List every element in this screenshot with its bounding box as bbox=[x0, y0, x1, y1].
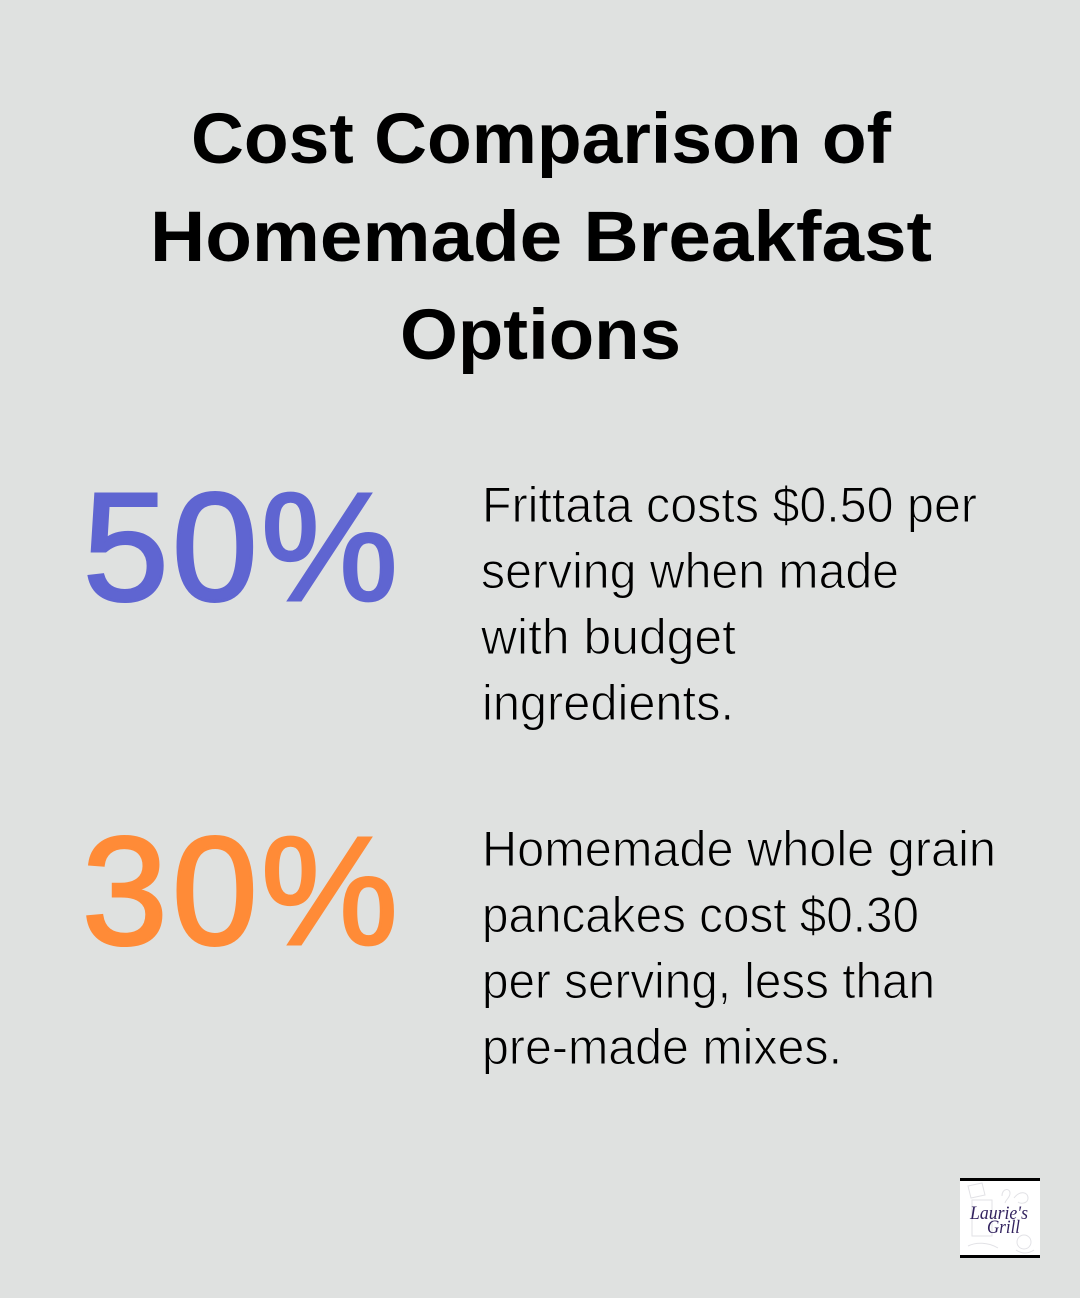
description: pancake cost: per serving, less than bbox=[482, 953, 935, 1009]
title bbox=[150, 100, 932, 375]
description: pancake cost: Homemade whole grain bbox=[482, 821, 996, 877]
description: pancake cost bbox=[482, 821, 996, 1075]
description: frittata cost: serving when made bbox=[481, 543, 899, 599]
logo: Laurie's Grill: Grill bbox=[987, 1217, 1020, 1238]
title: Homemade Breakfast bbox=[150, 198, 932, 277]
description: frittata cost: ingredients. bbox=[482, 675, 734, 731]
title: Cost Comparison of bbox=[191, 100, 891, 179]
description: frittata cost bbox=[480, 477, 977, 731]
description: pancake cost: pre-made mixes. bbox=[482, 1019, 842, 1075]
title: Options bbox=[400, 296, 681, 375]
stat: 30%: 30% bbox=[82, 805, 398, 977]
stat: 50%: 50% bbox=[83, 461, 398, 633]
description: frittata cost: with budget bbox=[480, 609, 736, 665]
description: frittata cost: Frittata costs $0.50 per bbox=[482, 477, 977, 533]
logo: Laurie's Grill: Laurie's bbox=[969, 1203, 1028, 1224]
logo: Laurie's Grill bbox=[960, 1178, 1040, 1258]
description: pancake cost: pancakes cost $0.30 bbox=[482, 887, 919, 943]
